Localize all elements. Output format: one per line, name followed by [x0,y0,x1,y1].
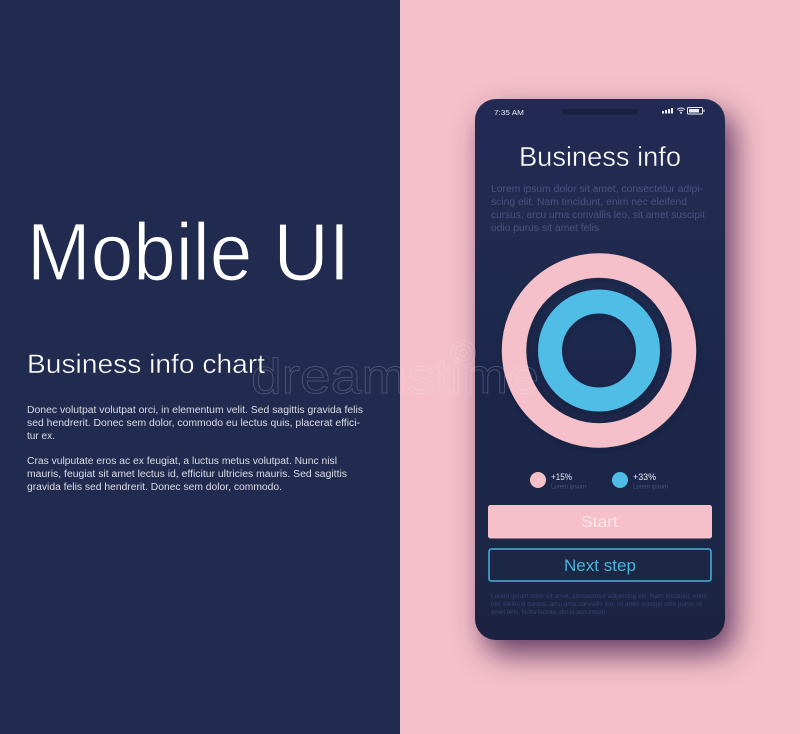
status time: 7:35 AM [494,108,524,117]
text block: footer fine print: Lorem ipsum dolor sit amet, consectetur adipiscing elit. Nam tincidunt, enim [491,594,707,600]
phone body [475,99,725,640]
icon: wifi [677,108,685,113]
text block: second paragraph: Cras vulputate eros ac ex feugiat, a luctus metus volutpat. Nunc nisl [27,456,337,467]
text block: footer fine print: amet felis. Nulla lacinia, dui id accumsan. [491,610,607,616]
heading: Business info chart: Business info chart [27,349,266,379]
title: Mobile UI: Mobile UI [27,207,350,298]
text block: intro lorem: Lorem ipsum dolor sit amet, consectetur adipi- [491,183,703,195]
text block: second paragraph: gravida felis sed hendrerit. Donec sem dolor, commodo. [27,482,282,493]
button: Next step: Next step [564,556,636,575]
left text column [27,207,363,493]
text block: first paragraph [27,405,363,442]
button: Start [488,505,712,538]
watermark: dreamstime: dreamstime [251,350,539,404]
legend item: blue +33% [612,472,668,490]
icon: signal bars [662,108,673,114]
text block: first paragraph: tur ex. [27,431,55,442]
chart ring: blue inner [550,302,648,400]
text block: first paragraph: Donec volutpat volutpat orci, in elementum velit. Sed sagittis gravida felis [27,405,363,416]
text block: intro lorem [491,183,705,234]
text block: first paragraph: sed hendrerit. Donec sem dolor, commodo eu lectus quis, placerat effici- [27,418,360,429]
panel: navy left background [0,0,400,734]
phone mockup [475,99,725,640]
legend item: pink +15% [530,472,586,490]
legend item: pink +15%: Lorem ipsum [551,484,586,490]
text block: footer fine print: nec eleifend cursus, arcu urna convallis leo, sit amet suscipit odio purus sit [491,602,702,608]
text block: intro lorem: cursus, arcu urna convallis leo, sit amet suscipit [491,209,705,221]
text block: intro lorem: scing elit. Nam tincidunt, enim nec eleifend [491,196,687,208]
chart ring: pink outer [514,266,684,436]
text block: second paragraph [27,456,347,493]
legend item: blue +33%: Lorem ipsum [633,484,668,490]
text block: footer fine print [491,594,707,616]
button: Start: Start [581,514,619,531]
button: Next step [489,549,711,581]
icon: battery [688,108,704,114]
phone notch [562,109,638,114]
chart: concentric rings [514,266,684,436]
text block: second paragraph: mauris, feugiat sit amet lectus id, efficitur ultricies mauris. Sed sagittis [27,469,347,480]
text block: intro lorem: odio purus sit amet felis [491,222,599,234]
legend [530,472,668,490]
status bar [494,108,704,117]
panel: pink right background [400,0,800,734]
heading: Business info: Business info [519,141,681,172]
legend item: blue +33%: +33% [633,472,657,483]
legend item: pink +15%: +15% [551,472,572,483]
